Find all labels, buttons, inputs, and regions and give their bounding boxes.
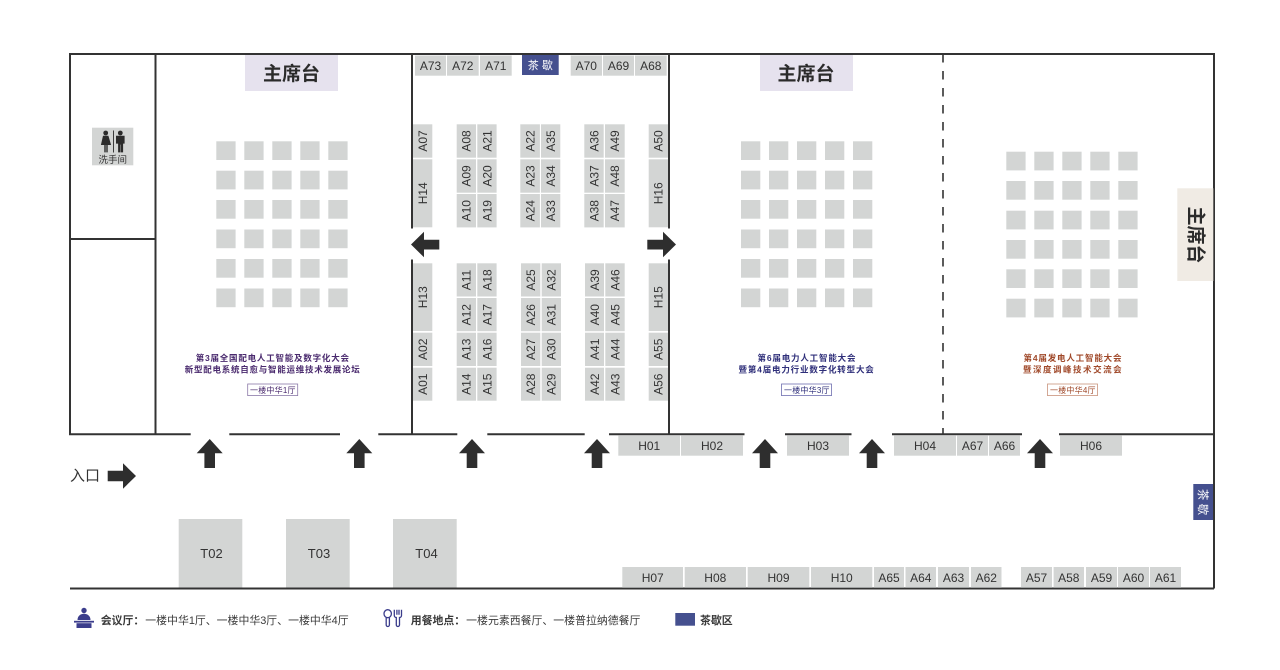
hall 1 location tag: 一楼中华1厅: [250, 385, 296, 395]
legend: tea area: 茶歇区: [700, 613, 733, 627]
booths: corridor upper row: A67: [962, 439, 983, 453]
arrow: to left hall: [411, 232, 439, 257]
arrows: into halls: [197, 439, 1053, 468]
legend: meeting halls: 会议厅：一楼中华1厅、一楼中华3厅、一楼中华4厅: [101, 613, 349, 627]
booths: top row: A70: [576, 59, 597, 73]
booths: corridor lower row: [622, 567, 1181, 588]
tea break right: [1193, 484, 1213, 520]
booths: centre upper block: A22: [524, 130, 538, 152]
booths: centre upper block: A19: [480, 200, 494, 221]
hall 4 seating: [1006, 152, 1138, 317]
booths: centre upper block: A20: [480, 165, 494, 187]
booths: centre upper block: A49: [608, 130, 622, 152]
panel: hall 1: [185, 55, 360, 396]
booths: corridor lower row: H07: [642, 571, 664, 585]
tea break top: [522, 55, 559, 75]
hall 3 title: [738, 353, 874, 374]
arrow: to right hall: [647, 232, 676, 257]
booths: centre lower block: A16: [480, 338, 494, 360]
booths: centre lower block: A13: [460, 338, 474, 360]
booths: centre upper block: A38: [587, 200, 601, 221]
booths: centre upper block: H14: [416, 182, 430, 204]
booths: centre lower block: A41: [588, 338, 602, 360]
booths: top row: [415, 56, 667, 76]
booths: centre lower block: A25: [524, 269, 538, 291]
booths: corridor lower row: H10: [831, 571, 853, 585]
booths: centre upper block: A07: [416, 130, 430, 152]
booths: centre lower block: [413, 263, 668, 401]
hall 3 location tag: 一楼中华3厅: [784, 385, 830, 395]
booths: centre lower block: H13: [416, 286, 430, 308]
booths: centre upper block: A36: [587, 130, 601, 152]
booths: centre upper block: A08: [460, 130, 474, 152]
booths: T02 to T04: T03: [308, 546, 330, 561]
booths: centre lower block: A39: [588, 269, 602, 291]
booths: centre lower block: A18: [480, 269, 494, 291]
booths: corridor upper row: H01: [638, 439, 661, 453]
hall 3 stage: 主席台: [777, 62, 835, 85]
hall 1 title: 新型配电系统自愈与智能运维技术发展论坛: [185, 364, 360, 374]
walls and room outlines: [69, 54, 1214, 588]
booths: centre lower block: A27: [524, 338, 538, 360]
booths: centre lower block: A45: [608, 304, 622, 325]
booths: centre lower block: A17: [480, 304, 494, 325]
icon: restroom: [92, 128, 133, 166]
booths: centre upper block: H16: [652, 182, 666, 204]
booths: centre upper block: [413, 124, 668, 227]
legend: dining: 用餐地点：一楼元素西餐厅、一楼普拉纳德餐厅: [411, 613, 641, 627]
booths: centre lower block: A32: [545, 269, 559, 291]
booths: centre lower block: A56: [652, 373, 666, 395]
booths: top row: A73: [420, 59, 441, 73]
hall 3 stage: [760, 55, 853, 91]
booths: centre lower block: A31: [545, 304, 559, 325]
booths: centre upper block: A34: [544, 165, 558, 187]
hall 1 title: [185, 353, 360, 374]
booths: centre upper block: A47: [608, 200, 622, 221]
booths: T02 to T04: T02: [200, 546, 223, 561]
booths: centre upper block: A21: [480, 130, 494, 152]
booths: centre upper block: A24: [524, 200, 538, 221]
booths: corridor lower row: A64: [910, 571, 932, 585]
arrow: entrance: [108, 463, 136, 489]
booths: centre lower block: A02: [416, 338, 430, 360]
hall 4 title: [1023, 353, 1122, 374]
booths: centre lower block: A44: [608, 338, 622, 360]
booths: centre lower block: A12: [460, 304, 474, 325]
booths: centre upper block: A10: [460, 200, 474, 221]
hall 1 stage: 主席台: [263, 62, 320, 85]
booths: centre upper block: A35: [544, 130, 558, 152]
booths: top row: A69: [608, 59, 629, 73]
hall 1 seating: [216, 141, 348, 307]
hall 3 title: 暨第4届电力行业数字化转型大会: [738, 364, 874, 374]
hall 3 seating: [741, 141, 872, 307]
hall 3 title: 第6届电力人工智能大会: [758, 353, 856, 363]
booths: corridor lower row: H09: [767, 571, 790, 585]
booths: centre lower block: A15: [480, 373, 494, 395]
panel: hall 4: [1006, 152, 1213, 396]
booths: centre lower block: A43: [608, 373, 622, 395]
entrance: 入口: [70, 468, 100, 484]
booths: corridor upper row: A66: [994, 439, 1015, 453]
booths: centre upper block: A50: [652, 130, 666, 152]
hall 1 title: 第3届全国配电人工智能及数字化大会: [196, 353, 349, 363]
entrance: [70, 463, 136, 489]
booths: corridor upper row: H04: [914, 439, 936, 453]
booths: T02 to T04: T04: [415, 546, 438, 561]
booths: corridor lower row: A65: [878, 571, 900, 585]
booths: centre upper block: A23: [524, 165, 538, 187]
booths: centre lower block: A01: [416, 373, 430, 395]
hall 4 title: 第4届发电人工智能大会: [1024, 353, 1122, 363]
booths: corridor lower row: A62: [976, 571, 997, 585]
booths: corridor lower row: A63: [943, 571, 964, 585]
booths: centre lower block: A29: [545, 373, 559, 395]
booths: centre lower block: A46: [608, 269, 622, 291]
booths: corridor lower row: A61: [1155, 571, 1176, 585]
restroom divider: [112, 130, 115, 152]
booths: centre lower block: A55: [652, 338, 666, 360]
booths: centre lower block: A30: [545, 338, 559, 360]
legend swatch: tea break: [675, 613, 695, 626]
booths: top row: A72: [452, 59, 474, 73]
booths: top row: A68: [640, 59, 662, 73]
hall 4 location tag: 一楼中华4厅: [1050, 385, 1096, 395]
booths: corridor upper row: H02: [701, 439, 723, 453]
hall 4 title: 暨深度调峰技术交流会: [1023, 364, 1122, 374]
booths: T02 to T04: [179, 519, 457, 588]
booths: centre upper block: A37: [587, 165, 601, 187]
booths: corridor lower row: A57: [1026, 571, 1047, 585]
booths: corridor lower row: A60: [1123, 571, 1144, 585]
booths: corridor lower row: H08: [704, 571, 727, 585]
hall 4 stage: [1177, 188, 1213, 281]
booths: corridor upper row: [618, 436, 1122, 456]
booths: centre lower block: A11: [460, 269, 474, 290]
icon: podium: [74, 608, 94, 628]
booths: centre lower block: A28: [524, 373, 538, 395]
hall 1 stage: [245, 55, 338, 91]
booths: centre lower block: A14: [460, 373, 474, 395]
tea break right: 茶 歇: [1196, 489, 1209, 516]
tea break top: 茶 歇: [528, 59, 553, 72]
icon: spoon and fork: [384, 610, 402, 627]
booths: corridor lower row: A58: [1058, 571, 1080, 585]
booths: centre lower block: A42: [588, 373, 602, 395]
booths: top row: A71: [485, 59, 507, 73]
icon: woman: [101, 131, 111, 152]
booths: centre lower block: A26: [524, 304, 538, 325]
booths: corridor lower row: A59: [1091, 571, 1112, 585]
booths: corridor upper row: H06: [1080, 439, 1102, 453]
hall 4 stage: 主席台: [1184, 206, 1208, 264]
icon: man: [116, 131, 125, 152]
booths: centre upper block: A09: [460, 165, 474, 187]
panel: hall 3: [738, 55, 874, 396]
restroom label: 洗手间: [98, 154, 127, 166]
booths: centre upper block: A33: [544, 200, 558, 221]
booths: centre lower block: H15: [652, 286, 666, 308]
booths: centre upper block: A48: [608, 165, 622, 187]
legend: [74, 608, 733, 628]
booths: centre lower block: A40: [588, 304, 602, 325]
booths: corridor upper row: H03: [807, 439, 829, 453]
